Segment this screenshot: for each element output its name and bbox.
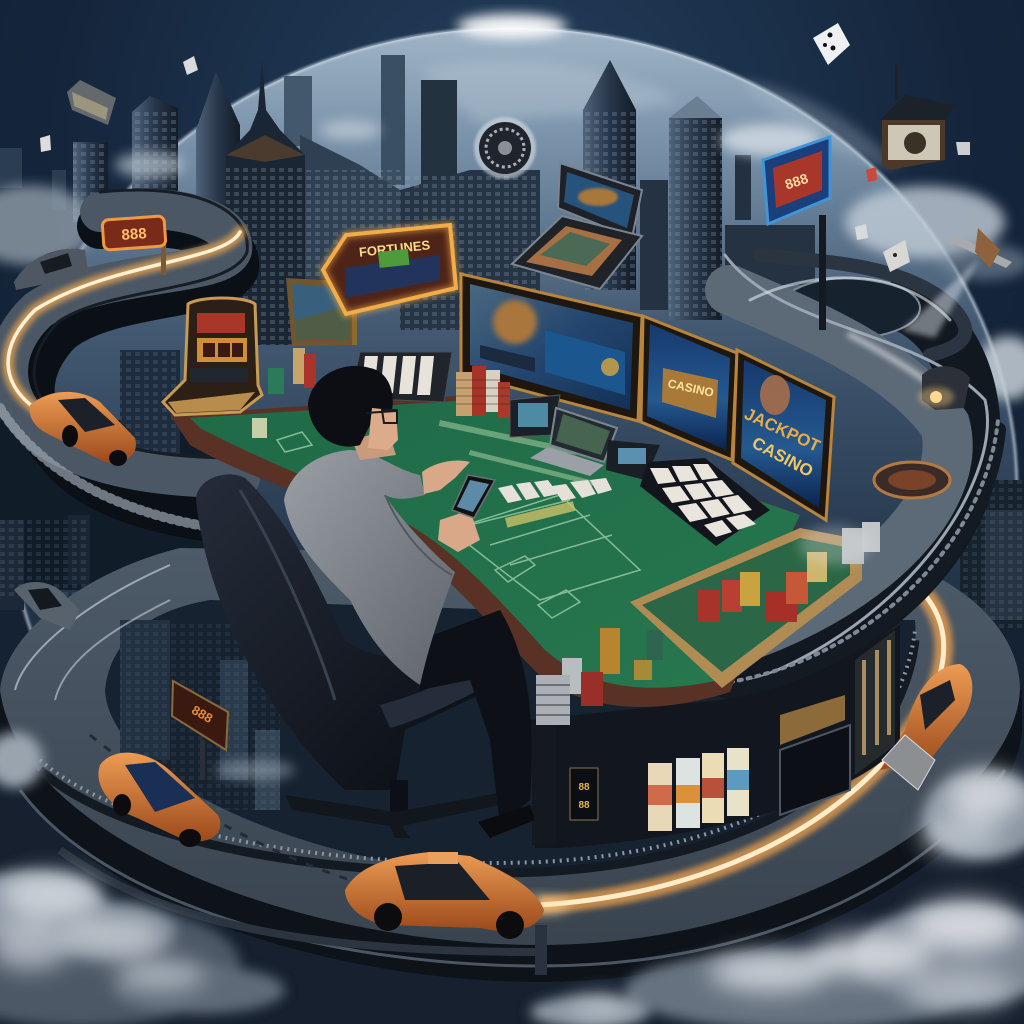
open tablet (512, 163, 642, 289)
far city skyline (0, 55, 815, 345)
chip tray right (630, 462, 950, 688)
trousers (420, 610, 532, 825)
monitor right: CASINO (749, 433, 816, 481)
car: dark right (918, 366, 970, 410)
casino base building: 88 (578, 782, 590, 793)
lower road sign: 888 (189, 702, 215, 726)
car: left orange (30, 392, 136, 466)
small side screen (286, 278, 355, 346)
monitor right: JACKPOT (741, 404, 824, 456)
lower road sign (172, 681, 228, 780)
person (284, 366, 535, 838)
billboard top right: 888 (783, 170, 810, 192)
casino base building (530, 625, 900, 848)
left road sign (102, 216, 166, 275)
laptop and small devices (510, 395, 660, 480)
sweater (284, 450, 455, 685)
marquee sign: FORTUNES (358, 237, 431, 260)
rails (40, 640, 915, 873)
office chair (196, 474, 522, 838)
floating dice and cards (40, 23, 970, 272)
playing cards fan (498, 478, 612, 503)
chip stacks on table (252, 348, 663, 845)
bottom ring road (0, 548, 1022, 982)
monitor right (733, 350, 834, 520)
car: grey upper left (14, 249, 88, 290)
table rim (170, 395, 800, 707)
poster windows (648, 748, 749, 831)
casino base building: 88 (578, 800, 590, 811)
billboard top right (763, 137, 830, 330)
main tower (226, 60, 305, 345)
hands (422, 460, 470, 494)
monitor middle: CASINO (667, 376, 715, 400)
roulette wheel (474, 117, 536, 179)
phone (452, 475, 495, 518)
hair (308, 366, 393, 447)
clouds behind roads (0, 120, 1024, 400)
right upper road (720, 255, 998, 692)
car: grey lower left (14, 582, 80, 630)
casino table (170, 352, 800, 707)
marquee sign (323, 225, 456, 345)
car: bottom orange (345, 852, 570, 939)
car: right orange (880, 664, 972, 790)
upper left road (0, 190, 247, 530)
monitor left (461, 274, 642, 421)
car: lower left orange (98, 753, 220, 847)
playing cards on table (640, 458, 770, 546)
felt markings (277, 432, 640, 618)
glowing trail (540, 595, 944, 905)
dark lower city (0, 350, 1024, 630)
airship with light beam (902, 228, 1012, 338)
foreground clouds (0, 732, 1024, 1024)
slot machine (163, 298, 262, 415)
neck and face (352, 430, 396, 460)
floating lantern tower (880, 65, 955, 170)
small sign (570, 768, 598, 820)
left road sign: 888 (121, 225, 147, 244)
ring inner hole (105, 600, 916, 875)
floating cube top left (67, 80, 116, 125)
table cards left (350, 352, 452, 402)
monitor middle (641, 316, 737, 460)
gold plaque (780, 695, 845, 745)
glasses (366, 410, 397, 423)
ring wall (0, 690, 1022, 982)
